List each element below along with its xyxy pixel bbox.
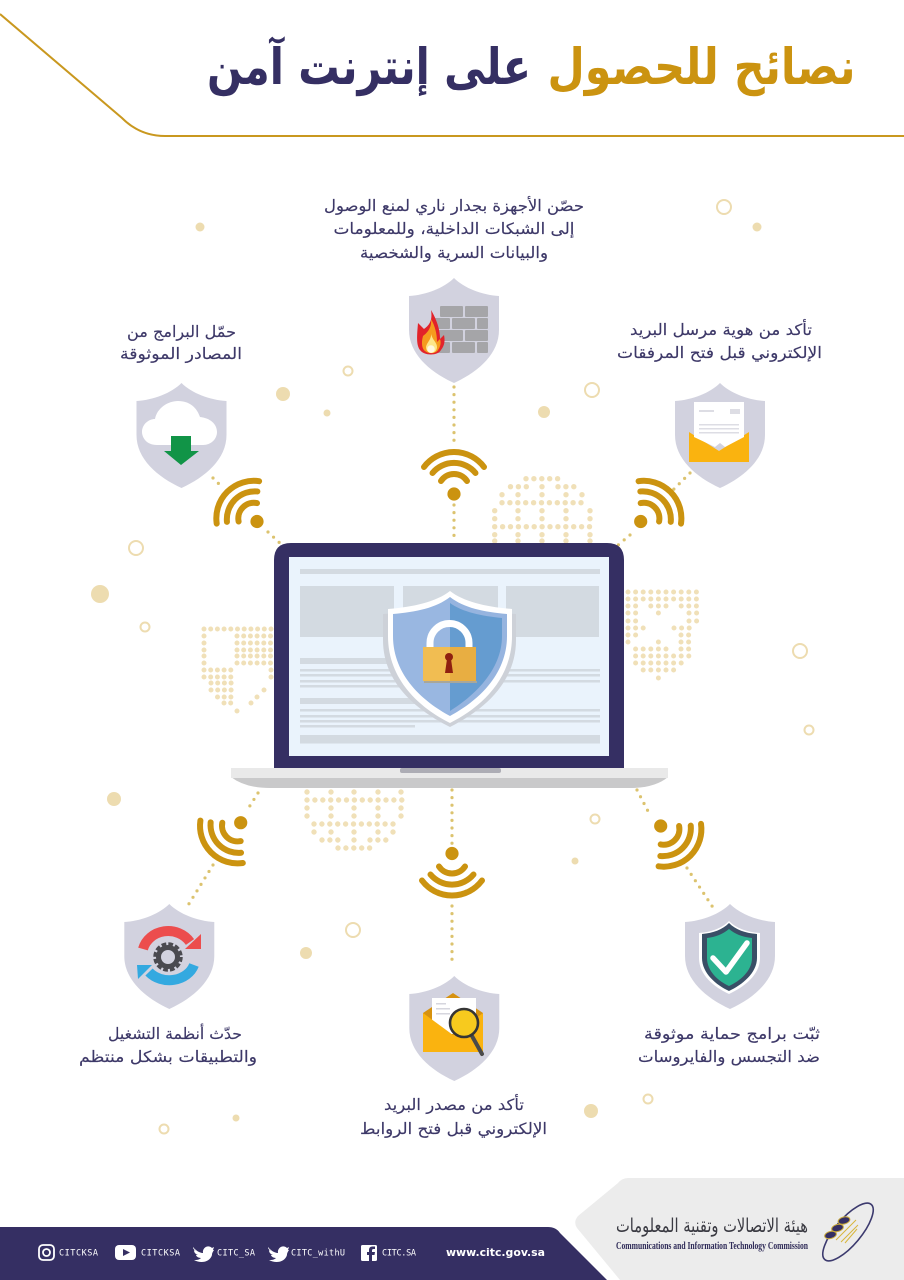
- screen content: [300, 569, 600, 744]
- icon: CITC emblem: [815, 1196, 881, 1268]
- youtube handle: CITCKSA: [141, 1248, 180, 1258]
- dotted globe top: [495, 479, 591, 541]
- icon: firewall shield: [409, 278, 499, 383]
- wifi icon: update: [190, 797, 267, 874]
- panel: email source tip: [360, 976, 547, 1139]
- panel: firewall tip: [324, 196, 584, 383]
- firewall text: إلى الشبكات الداخلية، وللمعلومات: [334, 220, 574, 239]
- panel: update tip: [79, 904, 257, 1067]
- icon: facebook: [361, 1245, 377, 1261]
- protection text: [638, 1025, 820, 1067]
- background decorative dots: [91, 200, 814, 1134]
- laptop body: [274, 543, 624, 768]
- website: www.citc.gov.sa: [446, 1246, 545, 1259]
- download text: [120, 323, 242, 363]
- twitter handle: CITC_SA: [217, 1248, 255, 1258]
- logo panel: [575, 1178, 904, 1280]
- update text: والتطبيقات بشكل منتظم: [79, 1048, 257, 1067]
- email source text: [360, 1094, 547, 1139]
- facebook handle: CITC.SA: [382, 1248, 416, 1258]
- protection text: ثبّت برامج حماية موثوقة: [644, 1025, 820, 1043]
- icon: instagram: [39, 1245, 54, 1260]
- update text: [79, 1023, 257, 1067]
- logo Arabic name: هيئة الاتصالات وتقنية المعلومات: [616, 1215, 808, 1237]
- wifi icon: email source: [422, 847, 482, 896]
- dotted connectors: [187, 387, 714, 962]
- title: نصائح للحصول: [548, 38, 856, 97]
- laptop base: [231, 768, 668, 788]
- icon: envelope with letter: [675, 383, 765, 488]
- download text: حمّل البرامج من: [127, 323, 236, 341]
- footer bar: [0, 1227, 607, 1280]
- dotted shield right: [628, 592, 697, 678]
- protection text: ضد التجسس والفايروسات: [638, 1048, 820, 1067]
- icon: update gear: [124, 904, 214, 1009]
- icon: youtube: [115, 1245, 136, 1260]
- panel: protection tip: [638, 904, 820, 1067]
- icon: twitter second: [268, 1246, 289, 1262]
- laptop: [231, 543, 668, 788]
- central shield with padlock: [383, 591, 516, 727]
- email sender text: الإلكتروني قبل فتح المرفقات: [617, 344, 822, 363]
- icon: envelope with magnifier: [409, 976, 499, 1081]
- wifi icon: firewall: [424, 452, 484, 501]
- firewall text: والبيانات السرية والشخصية: [360, 244, 548, 263]
- email sender text: [617, 319, 822, 363]
- download text: المصادر الموثوقة: [120, 345, 242, 363]
- firewall text: [324, 196, 584, 263]
- logo English name: Communications and Information Technology Commission: [616, 1240, 808, 1252]
- second twitter handle: CITC_withU: [291, 1248, 345, 1258]
- panel: download tip: [120, 323, 242, 488]
- instagram handle: CITCKSA: [59, 1248, 98, 1258]
- laptop screen: [289, 557, 609, 756]
- icon: check shield: [685, 904, 775, 1009]
- wifi icon: email sender: [615, 471, 692, 547]
- firewall text: حصّن الأجهزة بجدار ناري لمنع الوصول: [324, 196, 584, 216]
- wifi icon: download: [206, 471, 283, 547]
- panel: email sender tip: [617, 319, 822, 488]
- header rule: [0, 14, 904, 136]
- wifi icon: protection: [635, 800, 712, 877]
- title: على إنترنت آمن: [207, 36, 531, 97]
- dotted globe bottom: [307, 792, 402, 848]
- email sender text: تأكد من هوية مرسل البريد: [630, 319, 812, 339]
- update text: حدّث أنظمة التشغيل: [108, 1023, 242, 1043]
- icon: cloud download: [136, 383, 226, 488]
- title: [207, 36, 856, 97]
- icon: twitter: [193, 1246, 214, 1262]
- dotted shield left: [204, 629, 272, 711]
- email source text: الإلكتروني قبل فتح الروابط: [360, 1120, 547, 1139]
- email source text: تأكد من مصدر البريد: [384, 1094, 524, 1114]
